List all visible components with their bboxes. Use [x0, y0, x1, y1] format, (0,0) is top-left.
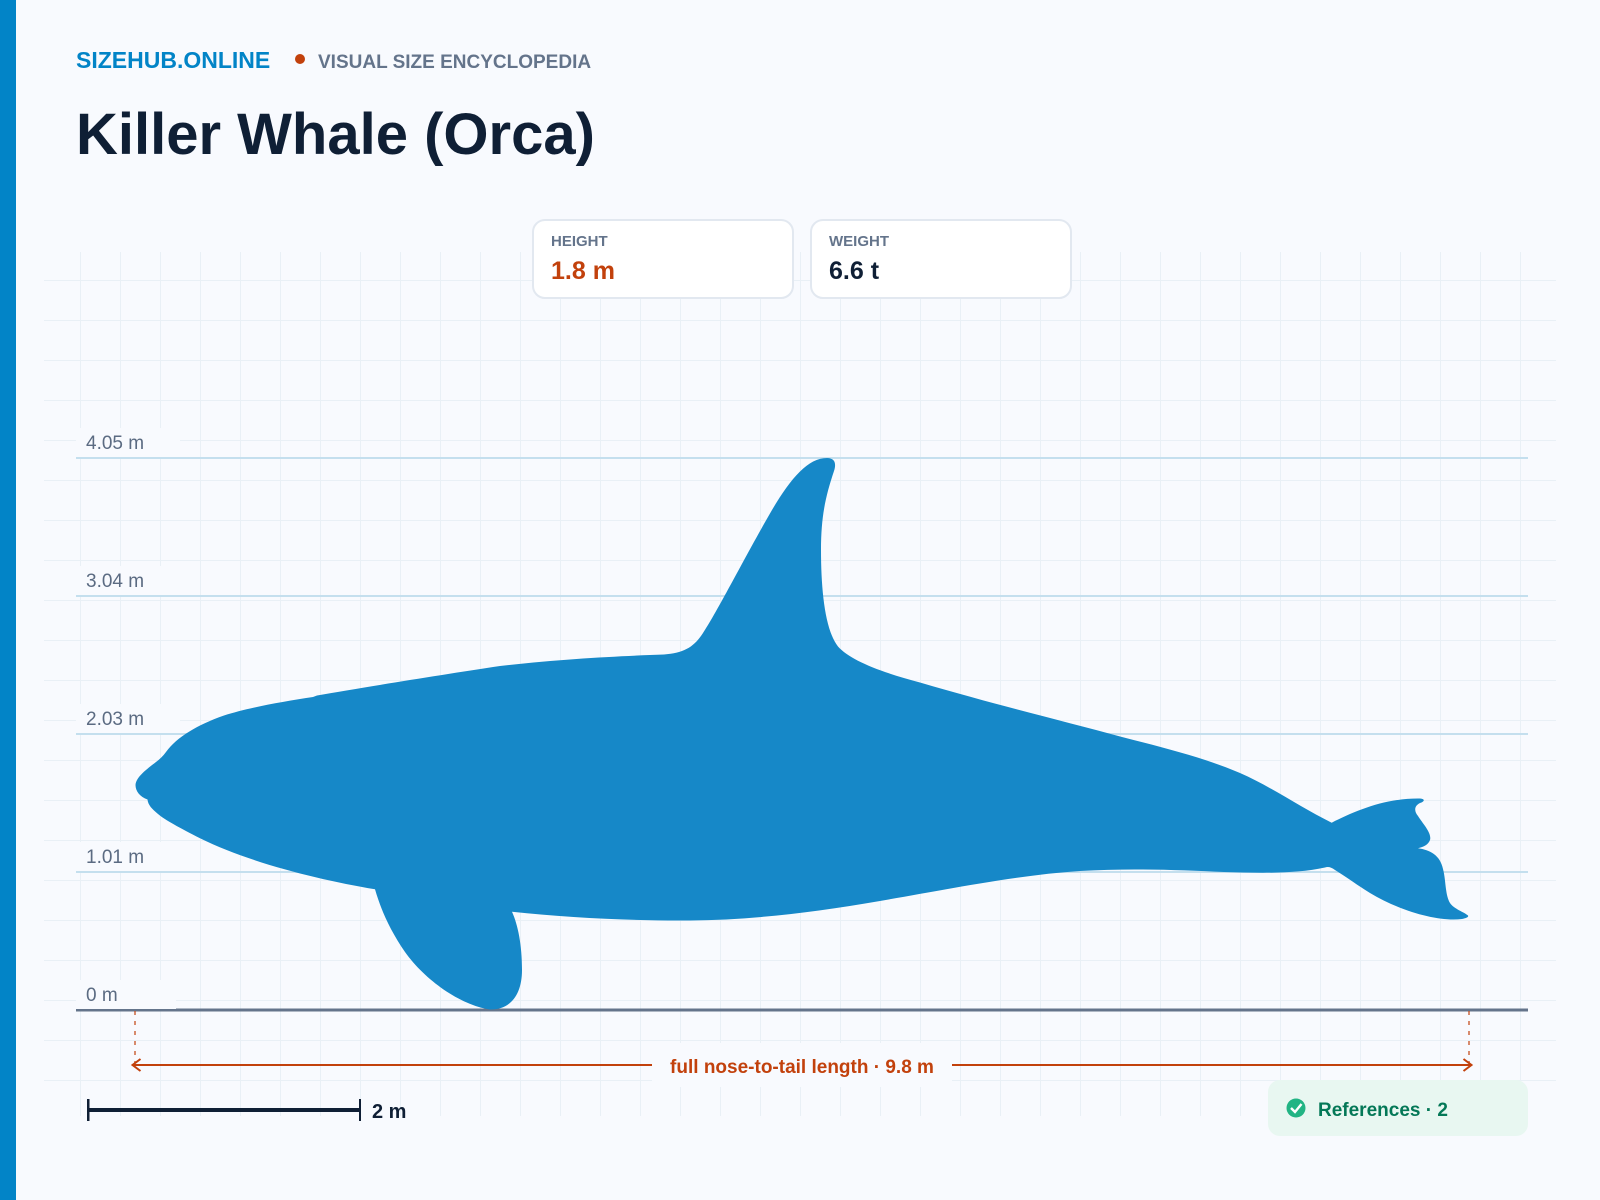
height scale labels: 3.04 m — [86, 571, 144, 592]
stat card: weight: WEIGHT — [829, 233, 889, 250]
height scale labels: 0 m — [86, 985, 118, 1006]
tagline: VISUAL SIZE ENCYCLOPEDIA — [318, 52, 591, 73]
scale bar: 2 m — [372, 1101, 406, 1123]
references badge — [1268, 1080, 1528, 1136]
accent bar — [0, 0, 16, 1200]
scale bar — [87, 1099, 406, 1123]
whale silhouette — [136, 458, 1468, 1010]
height scale labels: 1.01 m — [86, 847, 144, 868]
title: Killer Whale (Orca) — [76, 102, 595, 167]
height scale labels: 2.03 m — [86, 709, 144, 730]
brand name: SIZEHUB.ONLINE — [76, 47, 270, 73]
stat card: weight: 6.6 t — [829, 257, 880, 285]
height scale labels: 4.05 m — [86, 433, 144, 454]
stat card: height: 1.8 m — [551, 257, 615, 285]
ground line — [76, 1008, 1528, 1012]
references badge: References · 2 — [1318, 1100, 1448, 1121]
height scale labels — [76, 428, 180, 1009]
nose-to-tail length dimension — [132, 1011, 1472, 1087]
icon: check mark — [1286, 1098, 1306, 1118]
nose-to-tail length dimension: full nose-to-tail length · 9.8 m — [670, 1057, 934, 1078]
brand dot — [295, 54, 305, 64]
stat card: height — [533, 220, 793, 298]
header: brand line — [76, 47, 591, 73]
stat card: weight — [811, 220, 1071, 298]
height reference lines — [76, 458, 1528, 872]
stat card: height: HEIGHT — [551, 233, 608, 250]
